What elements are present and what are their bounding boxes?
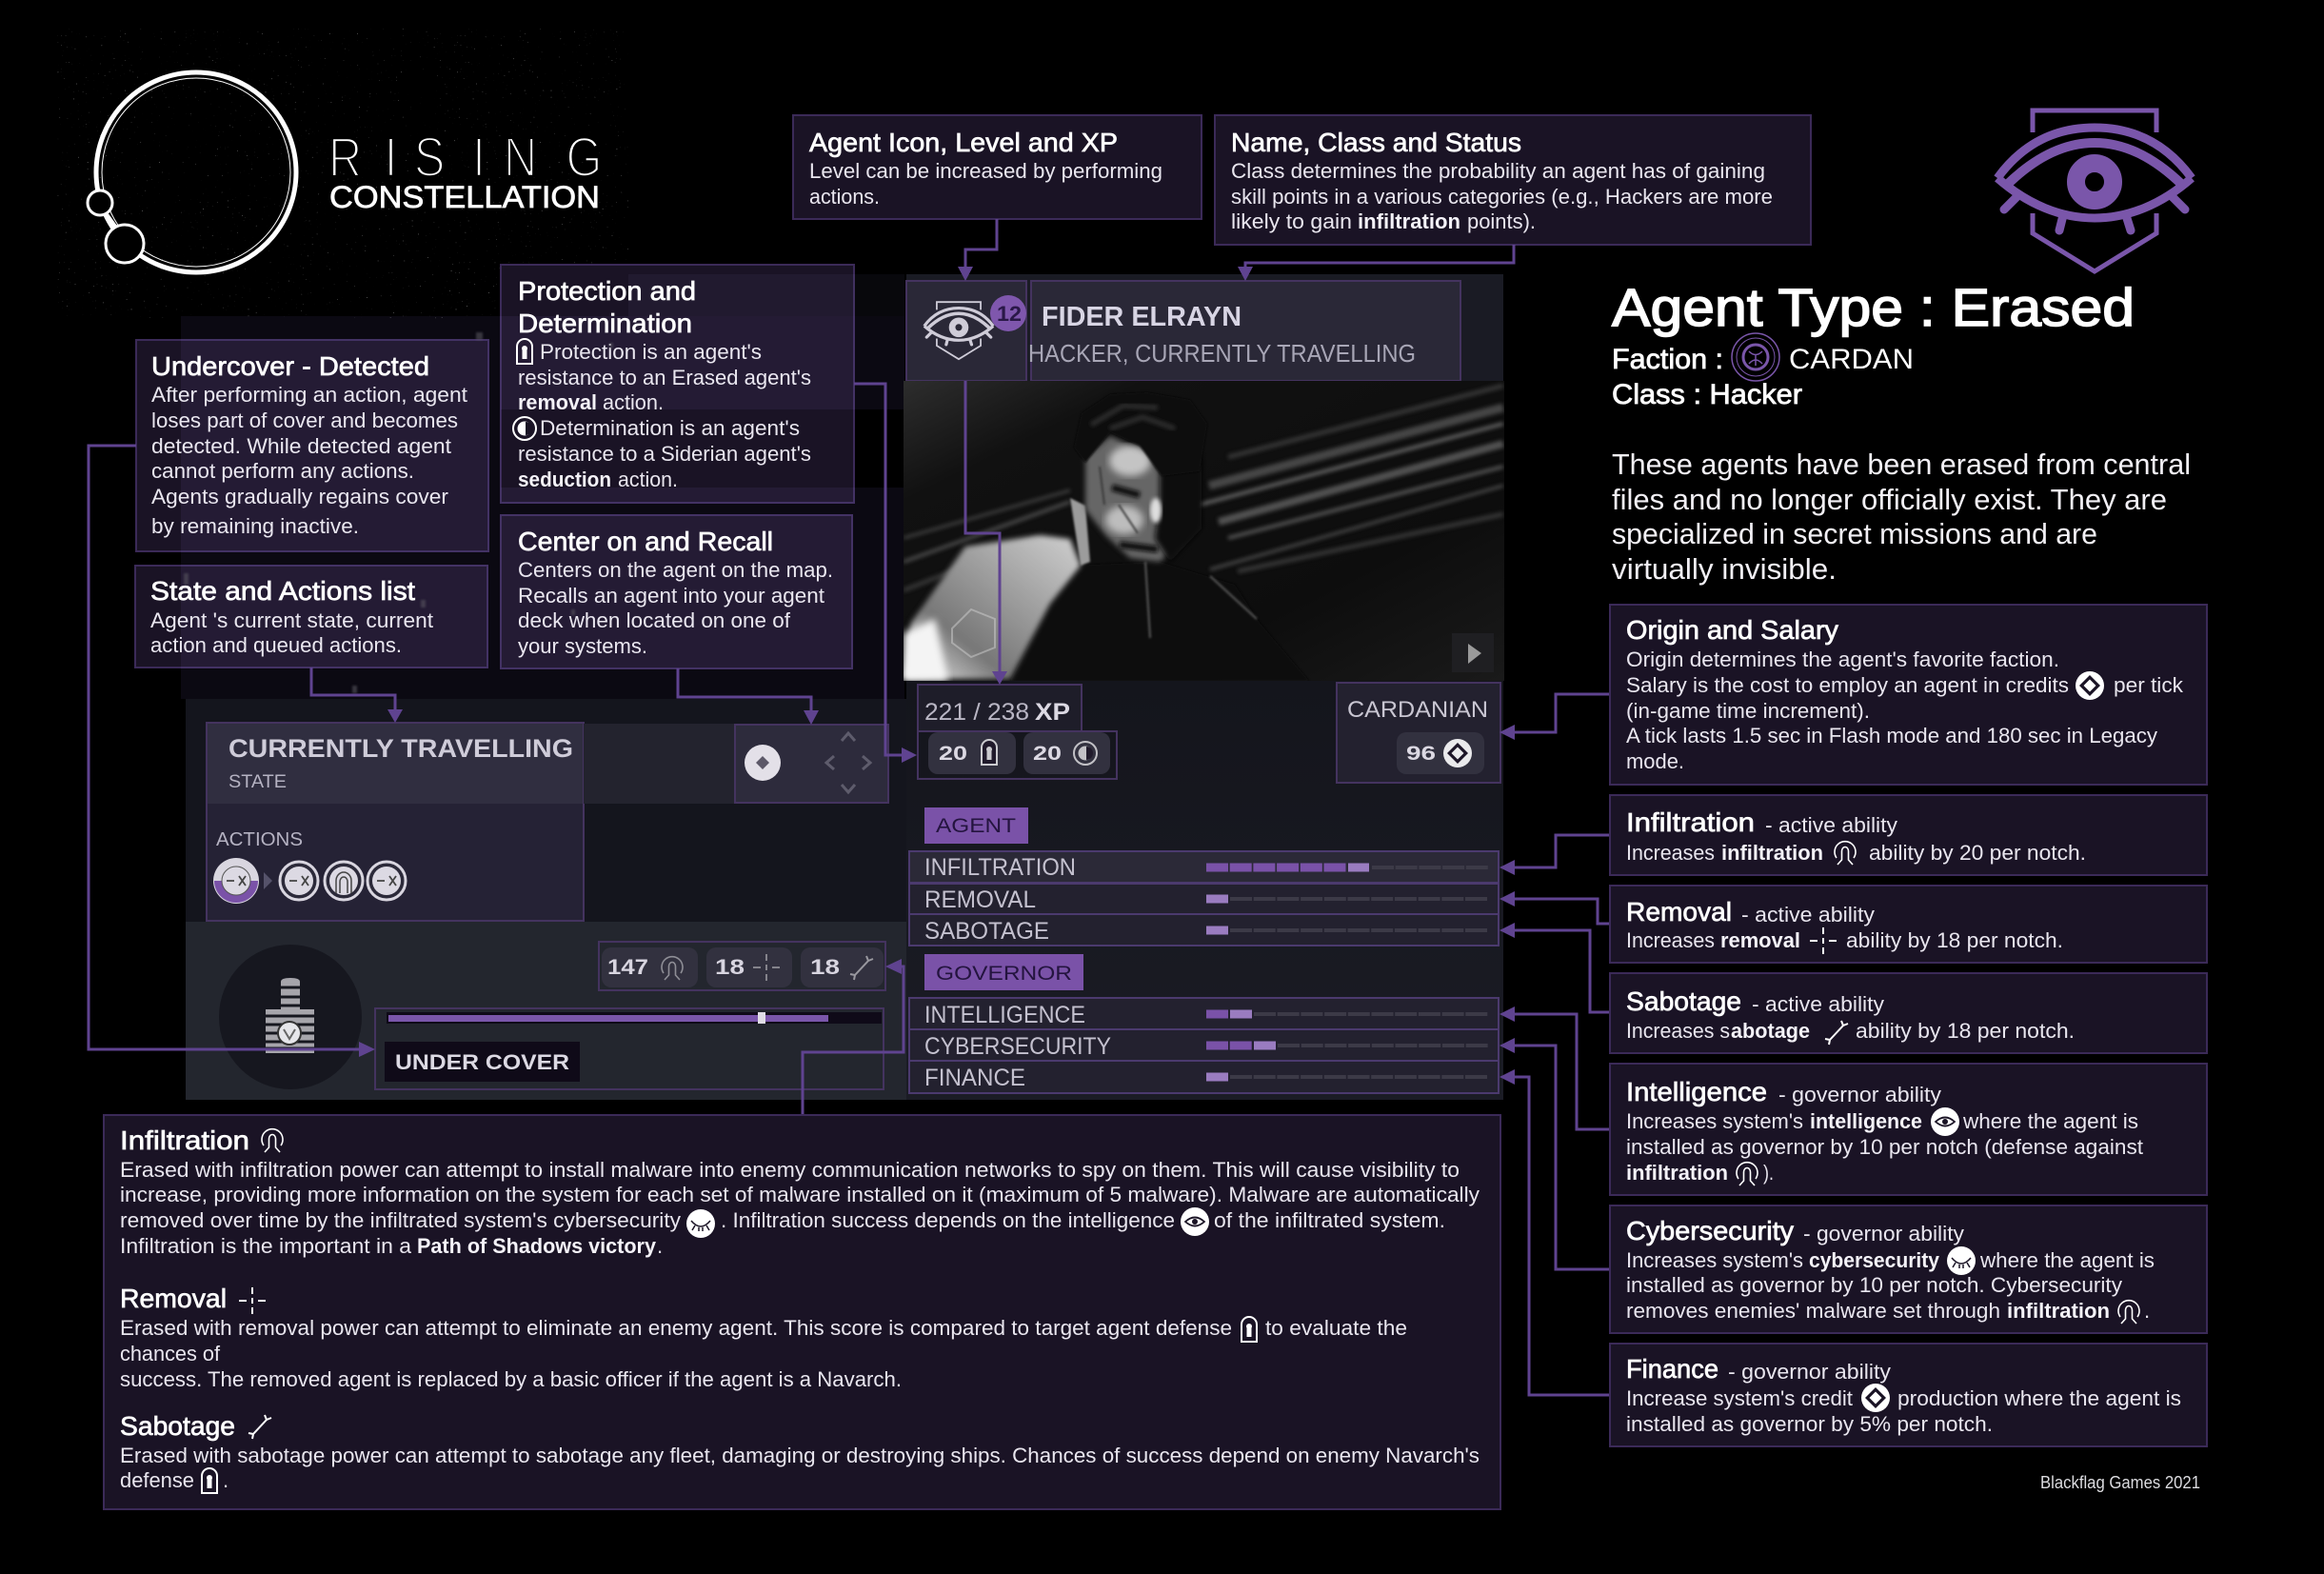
protection and determination stats: 20 xyxy=(1033,743,1062,765)
heading: Cybersecurity: - governor ability xyxy=(1803,1222,1964,1245)
text block: intelligence effect: Increases system's xyxy=(1626,1109,1803,1133)
agent name and class: HACKER, CURRENTLY TRAVELLING xyxy=(1028,339,1416,368)
title: Agent Type : Erased xyxy=(1612,277,2135,337)
xp counter: XP xyxy=(1035,699,1070,726)
cover bar and status: UNDER COVER xyxy=(395,1050,569,1074)
text block: state description: action and queued actions. xyxy=(150,633,402,657)
text block: cybersecurity effect: Increases system's xyxy=(1626,1248,1803,1272)
text block: class description: infiltration xyxy=(1358,209,1460,233)
heading: Undercover - Detected: Undercover - Detected xyxy=(151,351,429,381)
heading: Protection and Determination: Protection and xyxy=(518,276,696,306)
heading: Removal: Removal xyxy=(1626,897,1732,926)
text block: class description: skill points in a various categories (e.g., Hackers are more xyxy=(1231,185,1773,209)
tag: agent: AGENT xyxy=(936,815,1016,837)
section: Infiltration: Infiltration xyxy=(120,1126,249,1155)
panel: Finance ability xyxy=(1610,1344,2207,1446)
text block: infiltration effect xyxy=(1626,841,2086,865)
arrow: intelligence xyxy=(1500,1006,1610,1129)
text block: recall description: Recalls an agent into your agent xyxy=(518,584,824,608)
panel: agent card right column xyxy=(904,274,1504,1100)
text block: undercover description: loses part of cover and becomes xyxy=(151,408,458,432)
section: Removal: chances of xyxy=(120,1342,221,1365)
text block: origin description: mode. xyxy=(1626,749,1684,773)
text block: undercover description: cannot perform any actions. xyxy=(151,459,414,483)
cover bar and status xyxy=(375,1008,884,1089)
heading: Infiltration xyxy=(1626,807,1897,837)
agent type description: files and no longer officially exist. They are xyxy=(1612,483,2167,516)
heading: Protection and Determination xyxy=(518,276,696,338)
text block: cybersecurity effect: installed as governor by 10 per notch. Cybersecurity xyxy=(1626,1273,2122,1297)
text block: recall description: your systems. xyxy=(518,634,647,658)
panel: Intelligence ability xyxy=(1610,1064,2207,1195)
agent skill bars xyxy=(909,851,1499,946)
heading: Protection and Determination: Determination xyxy=(518,309,692,338)
arrow: agent icon callout to icon xyxy=(958,219,997,281)
text block: level description: Level can be increased by performing xyxy=(809,159,1162,183)
xp counter: 221 / 238 xyxy=(924,699,1029,726)
arrow: finance xyxy=(1500,1069,1610,1395)
section: Sabotage: Sabotage xyxy=(120,1411,235,1441)
portrait coat xyxy=(1278,645,1308,680)
state label: CURRENTLY TRAVELLING xyxy=(228,734,573,763)
logo ring emblem xyxy=(88,72,296,272)
section: Removal: Erased with removal power can attempt to eliminate an enemy agent. This score is compared to target agent defense xyxy=(120,1316,1232,1340)
arrow: infiltration xyxy=(1500,835,1610,875)
panel: Name, Class and Status xyxy=(1215,115,1811,245)
panel: Agent Icon, Level and XP xyxy=(793,115,1202,219)
text block: infiltration effect: Increases xyxy=(1626,841,1715,865)
section: Infiltration xyxy=(120,1126,1480,1258)
text block: infiltration effect: ability by 20 per notch. xyxy=(1869,841,2086,865)
text block: removal effect: ability by 18 per notch. xyxy=(1846,928,2063,952)
text block: sabotage effect: Increases s xyxy=(1626,1019,1730,1043)
logo wordmark: RISING xyxy=(328,128,602,189)
panel: Infiltration ability xyxy=(1610,795,2207,875)
tag: agent xyxy=(924,807,1028,844)
arrow: recall callout xyxy=(678,668,819,725)
heading: State and Actions list: State and Actions list xyxy=(150,576,415,606)
agent skill bars: REMOVAL xyxy=(924,887,1036,913)
heading: Finance xyxy=(1626,1354,1891,1384)
section: Infiltration: increase, providing more information on the system for each set of malware installed on it (maximum of 5 malware). Malware are automatically xyxy=(120,1183,1480,1206)
panel: Undercover - Detected xyxy=(136,340,488,551)
text block: protection description: Determination is an agent's xyxy=(540,416,800,440)
heading: Intelligence: - governor ability xyxy=(1778,1083,1941,1106)
tag: governor xyxy=(924,954,1083,990)
text block: origin description: (in-game time increment). xyxy=(1626,699,1870,723)
origin and salary stats: CARDANIAN xyxy=(1347,697,1488,723)
stats: infiltration removal sabotage xyxy=(599,942,885,990)
agent skill bars: INFILTRATION xyxy=(924,854,1076,881)
panel: agent card left column xyxy=(186,699,907,1100)
text block: protection description: seduction xyxy=(518,468,611,491)
text block: intelligence effect: where the agent is xyxy=(1962,1109,2138,1133)
section: Sabotage: . xyxy=(223,1468,228,1492)
icons: action queue xyxy=(213,858,406,904)
protection and determination stats: 20 xyxy=(939,743,967,765)
panel: State and Actions list xyxy=(135,566,487,667)
agent type description: virtually invisible. xyxy=(1612,552,1837,586)
text block: protection description: resistance to an Erased agent's xyxy=(518,366,811,389)
panel: ability explanations xyxy=(104,1115,1500,1509)
agent type description: These agents have been erased from central xyxy=(1612,448,2191,481)
agent type description: specialized in secret missions and are xyxy=(1612,517,2097,550)
section: Infiltration: removed over time by the infiltrated system's cybersecurity xyxy=(120,1208,681,1232)
arrow: origin to cardanian xyxy=(1500,694,1610,740)
arrow: state callout xyxy=(311,667,403,723)
agent icon and level xyxy=(906,281,1026,381)
arrow: protection callout xyxy=(854,384,917,763)
text block: intelligence effect: ). xyxy=(1763,1161,1774,1185)
text block: protection description: removal xyxy=(518,390,597,414)
panel: center and recall buttons xyxy=(735,725,888,803)
text block: class description: points). xyxy=(1467,209,1536,233)
text block: finance effect: installed as governor by 5% per notch. xyxy=(1626,1412,1993,1436)
stats: infiltration removal sabotage: 18 xyxy=(810,955,840,979)
section: Infiltration: Infiltration is the important in a xyxy=(120,1234,412,1258)
text block: class description xyxy=(1231,159,1773,233)
text block: cybersecurity effect: where the agent is xyxy=(1979,1248,2155,1272)
logo: Rising Constellation xyxy=(88,72,602,272)
arrow: removal xyxy=(1500,891,1610,924)
heading: Removal xyxy=(1626,897,1875,926)
text block: intelligence effect: infiltration xyxy=(1626,1161,1728,1185)
heading: Cybersecurity: Cybersecurity xyxy=(1626,1216,1794,1245)
arrow: level line to xp xyxy=(965,381,1007,685)
text block: intelligence effect: installed as governor by 10 per notch (defense against xyxy=(1626,1135,2143,1159)
text block: state description xyxy=(150,608,433,657)
agent portrait xyxy=(904,381,1504,681)
heading: Infiltration: Infiltration xyxy=(1626,807,1755,837)
section: Sabotage: Erased with sabotage power can attempt to sabotage any fleet, damaging or destroying ships. Chances of success depend on enemy Navarch's xyxy=(120,1444,1480,1467)
section: Removal: Removal xyxy=(120,1284,227,1313)
text block: cybersecurity effect xyxy=(1626,1246,2155,1324)
agent icon and level: 12 xyxy=(997,302,1022,326)
heading: Sabotage xyxy=(1626,986,1884,1016)
section: Removal: success. The removed agent is replaced by a basic officer if the agent is a Navarch. xyxy=(120,1367,902,1391)
text block: undercover description: Agents gradually regains cover xyxy=(151,485,448,508)
heading: Removal: - active ability xyxy=(1741,903,1875,926)
text block: class description: likely to gain xyxy=(1231,209,1352,233)
text block: finance effect xyxy=(1626,1384,2181,1436)
heading: Cybersecurity xyxy=(1626,1216,1964,1245)
governor skill bars: CYBERSECURITY xyxy=(924,1033,1111,1060)
text block: origin description: Salary is the cost to employ an agent in credits xyxy=(1626,673,2069,697)
icon: erased agent emblem xyxy=(1997,110,2192,271)
agent name and class xyxy=(1028,281,1460,381)
text block: finance effect: production where the agent is xyxy=(1897,1386,2181,1410)
text block: finance effect: Increase system's credit xyxy=(1626,1386,1853,1410)
text block: level description xyxy=(809,159,1162,209)
section: Removal xyxy=(120,1284,1407,1391)
text block: infiltration effect: infiltration xyxy=(1721,841,1823,865)
text block: origin description: per tick xyxy=(2114,673,2184,697)
agent name and class: FIDER ELRAYN xyxy=(1042,302,1241,332)
section: Infiltration: . Infiltration success depends on the intelligence xyxy=(721,1208,1175,1232)
class line: Class : Hacker xyxy=(1612,379,1802,410)
credit: Blackflag Games 2021 xyxy=(2040,1473,2200,1492)
section: Sabotage: defense xyxy=(120,1468,194,1492)
text block: intelligence effect xyxy=(1626,1107,2143,1185)
panel: Center on and Recall xyxy=(501,515,852,668)
cover gauge: silhouette xyxy=(219,945,362,1089)
heading: Infiltration: - active ability xyxy=(1765,813,1897,837)
text block: recall description: deck when located on one of xyxy=(518,608,791,632)
text block: state description: Agent 's current state, current xyxy=(150,608,433,632)
heading: Agent Icon, Level and XP: Agent Icon, Level and XP xyxy=(809,128,1118,157)
text block: level description: actions. xyxy=(809,185,880,209)
panel: Sabotage ability xyxy=(1610,973,2207,1053)
origin and salary stats: 96 xyxy=(1406,743,1436,765)
text block: protection description: Protection is an agent's xyxy=(540,340,762,364)
text block: cybersecurity effect: . xyxy=(2144,1299,2150,1323)
text block: cybersecurity effect: removes enemies' malware set through xyxy=(1626,1299,2000,1323)
heading: Intelligence: Intelligence xyxy=(1626,1077,1767,1106)
section: Sabotage xyxy=(120,1411,1480,1493)
agent type description xyxy=(1612,448,2191,586)
text block: recall description xyxy=(518,558,833,658)
heading: Sabotage: Sabotage xyxy=(1626,986,1741,1016)
faction line: Faction : xyxy=(1612,344,1723,375)
panel: Origin and Salary xyxy=(1610,605,2207,785)
faction line xyxy=(1612,333,1914,381)
text block: protection description: action. xyxy=(618,468,678,491)
heading: Sabotage: - active ability xyxy=(1752,992,1884,1016)
origin and salary stats xyxy=(1337,683,1500,783)
governor skill bars: INTELLIGENCE xyxy=(924,1002,1085,1028)
heading: Finance: - governor ability xyxy=(1728,1360,1891,1384)
section: Infiltration: Path of Shadows victory xyxy=(417,1234,657,1258)
panel: Protection and Determination xyxy=(501,265,854,503)
text block: protection description: resistance to a Siderian agent's xyxy=(518,442,811,466)
text block: origin description: A tick lasts 1.5 sec in Flash mode and 180 sec in Legacy xyxy=(1626,724,2157,747)
arrow: bottom panel to stats xyxy=(803,959,904,1115)
panel: Removal ability xyxy=(1610,886,2207,963)
stats: infiltration removal sabotage: 18 xyxy=(715,955,745,979)
section: Removal: to evaluate the xyxy=(1265,1316,1407,1340)
text block: removal effect: removal xyxy=(1720,928,1800,952)
xp counter xyxy=(918,685,1082,731)
protection and determination stats xyxy=(918,731,1117,779)
arrow: name callout to name xyxy=(1238,245,1514,281)
text block: undercover description: by remaining inactive. xyxy=(151,514,359,538)
text block: cybersecurity effect: infiltration xyxy=(2007,1299,2110,1323)
text block: sabotage effect xyxy=(1626,1019,2075,1045)
text block: class description: Class determines the probability an agent has of gaining xyxy=(1231,159,1765,183)
arrow: undercover callout xyxy=(89,446,375,1057)
portrait hair xyxy=(1074,392,1207,476)
text block: removal effect: Increases xyxy=(1626,928,1715,952)
section: Infiltration: Erased with infiltration power can attempt to install malware into enemy communication networks to spy on them. This will cause visibility to xyxy=(120,1158,1460,1182)
section: Infiltration: of the infiltrated system. xyxy=(1214,1208,1445,1232)
text block: origin description: Origin determines the agent's favorite faction. xyxy=(1626,648,2059,671)
governor skill bars: FINANCE xyxy=(924,1065,1025,1091)
section: Infiltration: . xyxy=(657,1234,663,1258)
heading: Center on and Recall: Center on and Recall xyxy=(518,527,773,556)
faction line: CARDAN xyxy=(1789,344,1914,375)
text block: protection description xyxy=(513,339,811,491)
governor skill bars xyxy=(909,998,1499,1093)
text block: cybersecurity effect: cybersecurity xyxy=(1809,1248,1940,1272)
title block: Agent Type Erased xyxy=(1612,277,2191,586)
portrait face xyxy=(1082,434,1168,565)
heading: Finance: Finance xyxy=(1626,1354,1718,1384)
logo wordmark: CONSTELLATION xyxy=(329,180,600,214)
text block: sabotage effect: ability by 18 per notch. xyxy=(1856,1019,2075,1043)
state label: STATE xyxy=(228,772,287,792)
arrow: sabotage xyxy=(1500,923,1610,1012)
heading: Intelligence xyxy=(1626,1077,1941,1106)
heading: Name, Class and Status: Name, Class and Status xyxy=(1231,128,1521,157)
panel: Cybersecurity ability xyxy=(1610,1205,2207,1333)
text block: origin description xyxy=(1626,648,2184,773)
text block: sabotage effect: abotage xyxy=(1731,1019,1810,1043)
state label xyxy=(228,734,573,792)
arrow: cybersecurity xyxy=(1500,1038,1610,1269)
agent skill bars: SABOTAGE xyxy=(924,918,1049,945)
text block: undercover description: detected. While detected agent xyxy=(151,434,451,458)
text block: recall description: Centers on the agent on the map. xyxy=(518,558,833,582)
text block: removal effect xyxy=(1626,927,2063,954)
text block: protection description: action. xyxy=(603,390,664,414)
panel: state and actions xyxy=(207,723,888,921)
actions label: ACTIONS xyxy=(216,829,303,850)
text block: undercover description: After performing an action, agent xyxy=(151,383,467,407)
heading: Origin and Salary: Origin and Salary xyxy=(1626,615,1838,645)
tag: governor: GOVERNOR xyxy=(936,963,1072,985)
stats: infiltration removal sabotage: 147 xyxy=(607,955,648,979)
text block: undercover description xyxy=(151,383,467,538)
text block: intelligence effect: intelligence xyxy=(1810,1109,1922,1133)
